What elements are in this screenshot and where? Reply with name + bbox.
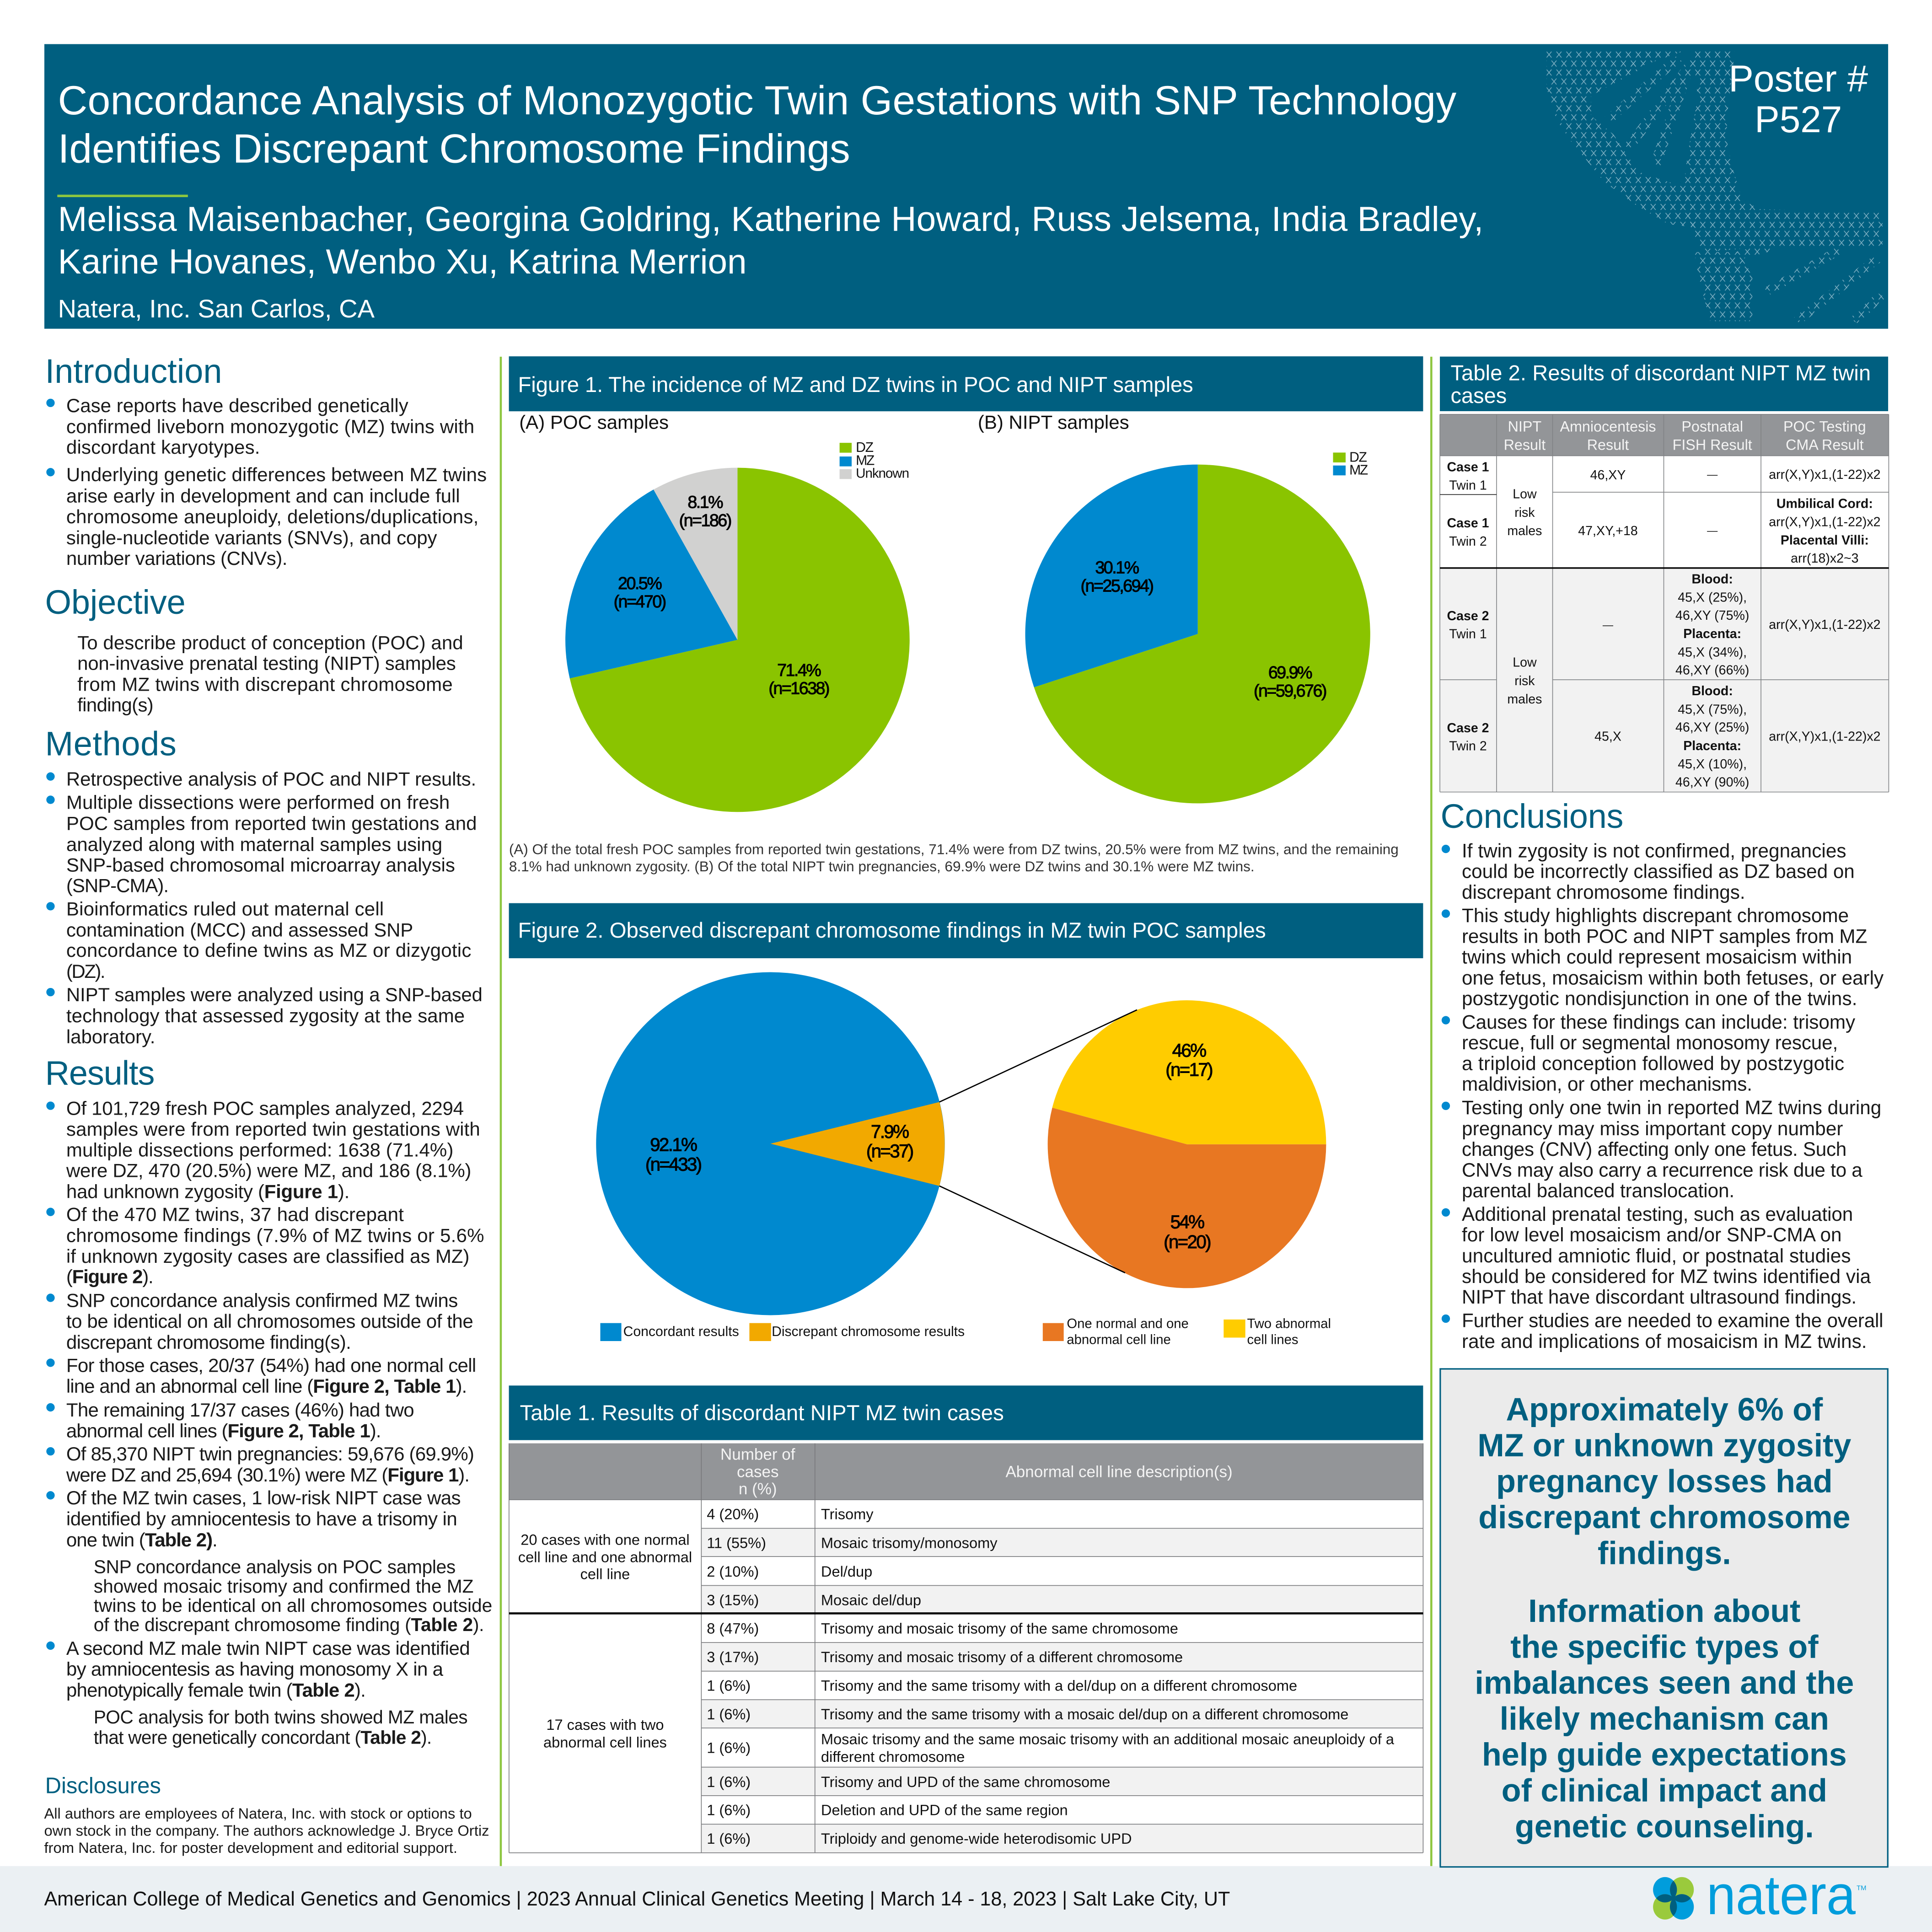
text: results: For those cases, 20/37 (54%) had one normal cell — [66, 1354, 476, 1376]
column divider right — [1430, 357, 1433, 1866]
text: results: were DZ and 25,694 (30.1%) were MZ (Figure 1). — [66, 1464, 470, 1486]
text: results: chromosome findings (7.9% of MZ twins or 5.6% — [66, 1224, 484, 1246]
text: conclusions: one fetus, mosaicism within both fetuses, or early — [1462, 967, 1884, 988]
callout: key takeaway: Approximately 6% of — [1506, 1392, 1823, 1428]
authors: Karine Hovanes, Wenbo Xu, Katrina Merrion — [58, 242, 746, 281]
text: conclusions: parental balanced translocation. — [1462, 1180, 1734, 1202]
table: discordant cases: 46,XY (66%) — [1675, 663, 1749, 678]
text: results: SNP concordance analysis on POC samples — [94, 1556, 456, 1578]
table: results: 1 (6%) — [707, 1706, 751, 1723]
table: results: 11 (55%) — [707, 1534, 766, 1551]
text: methods: analyzed along with maternal samples using — [66, 833, 442, 855]
heading bar: figure 2: Figure 2. Observed discrepant chromosome findings in MZ twin POC samples — [518, 918, 1266, 943]
table: discordant cases: 45,X (34%), — [1678, 645, 1747, 660]
pie chart: discrepant breakdown: (n=20) — [1164, 1231, 1210, 1252]
text: disclosures: own stock in the company. The authors acknowledge J. Bryce Ortiz — [44, 1822, 489, 1839]
text: introduction: Case reports have described genetically — [66, 395, 408, 416]
heading: conclusions: Conclusions — [1441, 797, 1623, 835]
table: discordant cases: Case 1 — [1447, 516, 1489, 531]
legend: right pie: cell lines — [1247, 1332, 1299, 1347]
text: introduction: Underlying genetic differences between MZ twins — [66, 464, 487, 485]
table: results — [509, 1444, 1423, 1853]
table: results: 1 (6%) — [707, 1830, 751, 1847]
text: methods: Bioinformatics ruled out maternal cell — [66, 898, 384, 919]
text: results: were DZ, 470 (20.5%) were MZ, and 186 (8.1%) — [66, 1159, 471, 1181]
table: results: 1 (6%) — [707, 1677, 751, 1694]
callout: key takeaway: the specific types of — [1510, 1629, 1819, 1665]
table: discordant cases: Case 2 — [1447, 721, 1489, 735]
text: results: by amniocentesis as having monosomy X in a — [66, 1658, 444, 1680]
callout: key takeaway: genetic counseling. — [1515, 1809, 1814, 1844]
table: results: Abnormal cell line description(s) — [1005, 1463, 1233, 1481]
legend: right pie: Two abnormal — [1247, 1316, 1331, 1331]
text: methods: laboratory. — [66, 1026, 155, 1047]
text: methods: NIPT samples were analyzed using a SNP-based — [66, 984, 483, 1005]
text: results: abnormal cell lines (Figure 2, Table 1). — [66, 1420, 381, 1442]
table: discordant cases: 46,XY (75%) — [1675, 608, 1749, 623]
bullets: introduction — [46, 399, 55, 476]
pie chart: POC samples: (n=1638) — [768, 679, 829, 698]
legend: left pie — [600, 1323, 965, 1341]
text: objective: To describe product of conception (POC) and — [77, 632, 463, 654]
section: methods — [45, 724, 483, 1047]
table: discordant cases: Postnatal — [1681, 419, 1743, 435]
heading: objective: Objective — [45, 583, 186, 621]
text: results: Of 101,729 fresh POC samples analyzed, 2294 — [66, 1097, 464, 1119]
heading bar: table 1 — [509, 1385, 1423, 1440]
caption: figure 1 — [509, 841, 1399, 875]
green accent rule — [57, 195, 188, 197]
table: discordant cases: 45,X (25%), — [1678, 590, 1747, 605]
table: discordant cases: Placental Villi: — [1781, 533, 1869, 547]
text: results: SNP concordance analysis confirmed MZ twins — [66, 1289, 458, 1311]
bullets: methods — [46, 773, 55, 996]
legend: POC samples: MZ — [856, 453, 875, 468]
text: conclusions: This study highlights discrepant chromosome — [1462, 905, 1849, 926]
callout: key takeaway: likely mechanism can — [1500, 1701, 1829, 1737]
table: results: different chromosome — [821, 1748, 965, 1765]
pie chart: POC samples — [565, 468, 910, 812]
legend: POC samples — [840, 440, 909, 481]
pie chart: all MZ twins: 7.9% — [871, 1121, 909, 1142]
text: results: identified by amniocentesis to have a trisomy in — [66, 1508, 457, 1530]
logo: natera: natera — [1707, 1864, 1856, 1926]
text: results: samples were from reported twin gestations with — [66, 1118, 480, 1140]
table: discordant cases: Blood: — [1691, 684, 1733, 698]
heading bar: table 2: cases — [1451, 383, 1507, 408]
subtitle: POC samples: (A) POC samples — [519, 411, 669, 433]
text: results: showed mosaic trisomy and confirmed the MZ — [94, 1576, 474, 1597]
text: introduction — [66, 395, 487, 569]
text: conclusions: should be considered for MZ twins identified via — [1462, 1266, 1871, 1287]
text: introduction: single-nucleotide variants (SNVs), and copy — [66, 527, 437, 548]
text: conclusions: twins which could represent mosaicism within — [1462, 946, 1852, 968]
table: discordant cases: — — [1707, 524, 1718, 536]
connector lines — [939, 1010, 1137, 1273]
callout: key takeaway: of clinical impact and — [1502, 1773, 1827, 1809]
pie chart: discrepant breakdown: 46% — [1172, 1040, 1206, 1061]
authors — [58, 200, 1483, 281]
text: conclusions: Testing only one twin in reported MZ twins during — [1462, 1097, 1881, 1118]
section: introduction — [45, 352, 487, 569]
pie chart: discrepant breakdown: 54% — [1170, 1212, 1204, 1233]
table: discordant cases: 45,X (75%), — [1678, 702, 1747, 717]
text: conclusions: NIPT that have discordant ultrasound findings. — [1462, 1286, 1857, 1308]
header banner — [44, 44, 1888, 329]
table: discordant cases: Twin 1 — [1449, 627, 1487, 642]
table: discordant cases: 46,XY (25%) — [1675, 720, 1749, 735]
text: results: phenotypically female twin (Table 2). — [66, 1679, 366, 1701]
text: conclusions: maldivision, or other mechanisms. — [1462, 1073, 1752, 1095]
table: results: Trisomy and mosaic trisomy of the same chromosome — [821, 1620, 1178, 1637]
section: disclosures — [44, 1774, 489, 1856]
table: discordant cases: Twin 2 — [1449, 739, 1487, 754]
text: conclusions: discrepant chromosome findings. — [1462, 881, 1745, 903]
table: discordant cases: Low — [1513, 655, 1537, 670]
text: conclusions: Further studies are needed to examine the overall — [1462, 1309, 1884, 1331]
table: discordant cases: 46,XY (90%) — [1675, 775, 1749, 790]
text: introduction: confirmed liveborn monozygotic (MZ) twins with — [66, 416, 474, 437]
table: discordant cases: arr(X,Y)x1,(1-22)x2 — [1769, 515, 1881, 529]
table: discordant cases: Result — [1504, 436, 1546, 453]
text: conclusions: results in both POC and NIPT samples from MZ — [1462, 926, 1867, 947]
text: objective: non-invasive prenatal testing (NIPT) samples — [77, 652, 456, 674]
text: conclusions: could be incorrectly classified as DZ based on — [1462, 860, 1855, 882]
table: results: Trisomy and UPD of the same chromosome — [821, 1773, 1110, 1790]
table: discordant cases: males — [1507, 692, 1542, 707]
callout: key takeaway: imbalances seen and the — [1475, 1665, 1854, 1701]
heading bar: table 1: Table 1. Results of discordant NIPT MZ twin cases — [520, 1401, 1004, 1425]
text: conclusions: changes (CNV) affecting only one fetus. Such — [1462, 1138, 1846, 1160]
callout: key takeaway: MZ or unknown zygosity — [1477, 1428, 1851, 1463]
table: results: cases — [737, 1463, 778, 1481]
poster title: Concordance Analysis of Monozygotic Twin Gestations with SNP Technology — [58, 77, 1456, 123]
table: discordant cases: Twin 1 — [1449, 478, 1487, 493]
table: results: Mosaic trisomy and the same mosaic trisomy with an additional mosaic aneuploidy of a — [821, 1731, 1395, 1748]
table: discordant cases: arr(X,Y)x1,(1-22)x2 — [1769, 730, 1881, 744]
pie chart: all MZ twins: (n=37) — [866, 1140, 913, 1161]
subtitle: NIPT samples: (B) NIPT samples — [978, 411, 1129, 433]
table: discordant cases: NIPT — [1508, 419, 1541, 435]
legend: right pie — [1043, 1316, 1331, 1347]
bullets: conclusions — [1442, 845, 1450, 1323]
text: disclosures: from Natera, Inc. for poster development and editorial support. — [44, 1839, 457, 1856]
text: results: discrepant chromosome finding(s). — [66, 1331, 351, 1353]
table: results: 1 (6%) — [707, 1802, 751, 1819]
table: results: 3 (17%) — [707, 1648, 759, 1665]
table: discordant cases: risk — [1514, 505, 1535, 520]
bullets: results — [46, 1101, 55, 1650]
table: discordant cases: arr(X,Y)x1,(1-22)x2 — [1769, 617, 1881, 632]
table: results: Number of — [720, 1445, 795, 1463]
text: results: had unknown zygosity (Figure 1). — [66, 1181, 349, 1202]
pie chart: NIPT samples: 30.1% — [1095, 558, 1139, 577]
table: discordant cases: Result — [1587, 436, 1629, 453]
text: conclusions: uncultured amniotic fluid, or postnatal studies — [1462, 1245, 1851, 1267]
callout: key takeaway — [1440, 1369, 1888, 1867]
table: discordant cases: Placenta: — [1683, 627, 1741, 641]
text: methods: technology that assessed zygosity at the same — [66, 1005, 465, 1026]
text: methods: Retrospective analysis of POC and NIPT results. — [66, 768, 476, 790]
table: results: 3 (15%) — [707, 1591, 759, 1608]
legend: left pie: Discrepant chromosome results — [772, 1324, 965, 1339]
table: discordant cases: Umbilical Cord: — [1776, 497, 1873, 511]
text: results: of the discrepant chromosome finding (Table 2). — [94, 1614, 484, 1635]
text: conclusions: Additional prenatal testing, such as evaluation — [1462, 1203, 1853, 1225]
pie chart: POC samples: 20.5% — [618, 574, 662, 593]
text: disclosures — [44, 1805, 489, 1856]
table: discordant cases: risk — [1514, 674, 1535, 688]
table: discordant cases: CMA Result — [1786, 436, 1864, 453]
authors: Melissa Maisenbacher, Georgina Goldring, Katherine Howard, Russ Jelsema, India Bradley, — [58, 200, 1483, 239]
callout: key takeaway: findings. — [1598, 1535, 1731, 1571]
text: conclusions: pregnancy may miss important copy number — [1462, 1118, 1843, 1139]
panel: table 2 — [1440, 357, 1889, 792]
poster number: P527 — [1755, 99, 1842, 140]
text: conclusions: postzygotic nondisjunction in one of the twins. — [1462, 987, 1857, 1009]
table: results: Mosaic del/dup — [821, 1591, 921, 1608]
text: results: (Figure 2). — [66, 1266, 154, 1288]
table: discordant cases — [1440, 414, 1889, 792]
table: results: 4 (20%) — [707, 1505, 759, 1522]
text: methods: concordance to define twins as MZ or dizygotic — [66, 939, 471, 961]
text: results: Of the MZ twin cases, 1 low-risk NIPT case was — [66, 1487, 461, 1508]
text: methods — [66, 768, 483, 1047]
heading bar: figure 2 — [509, 903, 1423, 958]
pie chart: all MZ twins — [596, 972, 945, 1315]
heading bar: table 2 — [1440, 357, 1888, 411]
table: discordant cases: males — [1507, 524, 1542, 538]
table: discordant cases: 45,X (10%), — [1678, 757, 1747, 772]
text: conclusions: CNVs may also carry a recurrence risk due to a — [1462, 1159, 1862, 1181]
table: discordant cases: FISH Result — [1673, 436, 1752, 453]
table: discordant cases: Case 2 — [1447, 609, 1489, 623]
text: results: line and an abnormal cell line (Figure 2, Table 1). — [66, 1375, 467, 1397]
pie chart: NIPT samples — [1025, 465, 1370, 803]
legend: NIPT samples — [1333, 450, 1368, 478]
text: methods: POC samples from reported twin gestations and — [66, 813, 477, 834]
table: results: Deletion and UPD of the same region — [821, 1802, 1068, 1819]
legend: POC samples: Unknown — [856, 466, 909, 481]
legend: left pie: Concordant results — [623, 1324, 739, 1339]
text: introduction: arise early in development and can include full — [66, 485, 460, 506]
table: discordant cases: — — [1707, 468, 1718, 480]
text: results: POC analysis for both twins showed MZ males — [94, 1707, 468, 1728]
logo: natera: TM — [1857, 1884, 1867, 1892]
text: objective: from MZ twins with discrepant chromosome — [77, 673, 453, 695]
text: conclusions: a triploid conception followed by postzygotic — [1462, 1053, 1844, 1074]
text: results: Of the 470 MZ twins, 37 had discrepant — [66, 1204, 404, 1225]
callout: key takeaway: pregnancy losses had — [1496, 1463, 1833, 1499]
section: conclusions — [1441, 797, 1884, 1352]
table: discordant cases: 47,XY,+18 — [1578, 524, 1638, 538]
text: results: if unknown zygosity cases are classified as MZ) — [66, 1245, 469, 1267]
table: results: 1 (6%) — [707, 1739, 751, 1756]
legend: right pie: abnormal cell line — [1067, 1332, 1171, 1347]
heading: introduction: Introduction — [45, 352, 222, 390]
section: results — [45, 1054, 492, 1748]
legend: NIPT samples: DZ — [1349, 450, 1367, 465]
table: discordant cases: — — [1603, 619, 1614, 631]
table: results: Trisomy — [821, 1505, 874, 1522]
text: conclusions: Causes for these findings can include: trisomy — [1462, 1011, 1856, 1033]
text: methods: Multiple dissections were performed on fresh — [66, 792, 450, 813]
text: methods: contamination (MCC) and assessed SNP — [66, 919, 413, 940]
heading bar: figure 1 — [509, 356, 1423, 411]
legend: right pie: One normal and one — [1067, 1316, 1189, 1331]
pie chart: NIPT samples: (n=25,694) — [1081, 576, 1153, 595]
text: conclusions: If twin zygosity is not confirmed, pregnancies — [1462, 840, 1846, 861]
text: results: Of 85,370 NIPT twin pregnancies: 59,676 (69.9%) — [66, 1443, 474, 1465]
panel: figure 2 — [509, 903, 1423, 1347]
table: results: 2 (10%) — [707, 1563, 759, 1580]
heading: results: Results — [45, 1054, 155, 1092]
pie chart: NIPT samples: (n=59,676) — [1254, 681, 1326, 700]
pie chart: POC samples: 71.4% — [777, 660, 821, 680]
table: discordant cases: arr(X,Y)x1,(1-22)x2 — [1769, 467, 1881, 482]
text: introduction: discordant karyotypes. — [66, 436, 260, 458]
table: discordant cases: arr(18)x2~3 — [1791, 551, 1859, 566]
table: discordant cases: Low — [1513, 487, 1537, 502]
text: methods: (DZ). — [66, 961, 106, 982]
table: discordant cases: Amniocentesis — [1560, 419, 1656, 435]
text: objective — [77, 632, 463, 715]
pie chart: NIPT samples: 69.9% — [1268, 663, 1312, 682]
table: results: Del/dup — [821, 1563, 872, 1580]
table: results: n (%) — [739, 1480, 777, 1498]
caption: figure 1: (A) Of the total fresh POC samples from reported twin gestations, 71.4% were from DZ twins, 20.5% were from MZ twins, and the remaining — [509, 841, 1399, 857]
table: results: 1 (6%) — [707, 1773, 751, 1790]
callout: key takeaway: discrepant chromosome — [1478, 1499, 1851, 1535]
heading bar: figure 1: Figure 1. The incidence of MZ and DZ twins in POC and NIPT samples — [518, 373, 1193, 397]
table: discordant cases: Placenta: — [1683, 739, 1741, 753]
table: discordant cases: Twin 2 — [1449, 534, 1487, 549]
table: discordant cases: Case 1 — [1447, 460, 1489, 474]
footer band — [0, 1864, 1932, 1932]
poster title: Identifies Discrepant Chromosome Findings — [58, 126, 850, 172]
text: results: to be identical on all chromosomes outside of the — [66, 1310, 473, 1332]
text: conclusions — [1462, 840, 1884, 1352]
text: conclusions: rate and implications of mosaicism in MZ twins. — [1462, 1331, 1867, 1352]
text: results: A second MZ male twin NIPT case was identified — [66, 1637, 470, 1659]
text: results: twins to be identical on all chromosomes outside — [94, 1595, 492, 1616]
pie chart: discrepant breakdown: (n=17) — [1165, 1059, 1212, 1080]
caption: figure 1: 8.1% had unknown zygosity. (B) Of the total NIPT twin pregnancies, 69.9% were DZ twins and 30.1% were MZ twins. — [509, 858, 1255, 875]
text: results: multiple dissections performed: 1638 (71.4%) — [66, 1139, 453, 1161]
table: results: 8 (47%) — [707, 1620, 759, 1637]
table: discordant cases: Blood: — [1691, 572, 1733, 586]
panel: figure 1 — [509, 356, 1423, 875]
conference line: American College of Medical Genetics and Genomics | 2023 Annual Clinical Genetics Meeting | March 14 - 18, 2023 | Salt Lake City, UT — [44, 1888, 1230, 1910]
table: results: Triploidy and genome-wide heterodisomic UPD — [821, 1830, 1132, 1847]
DNA helix decoration — [1546, 49, 1883, 321]
table: results: Trisomy and the same trisomy with a mosaic del/dup on a different chromosome — [821, 1706, 1348, 1723]
text: methods: SNP-based chromosomal microarray analysis — [66, 854, 455, 875]
affiliation: Natera, Inc. San Carlos, CA — [58, 294, 375, 323]
pie chart: POC samples: (n=470) — [614, 592, 666, 611]
table: discordant cases: 45,X — [1594, 730, 1621, 744]
pie chart: discrepant breakdown — [1048, 1000, 1326, 1288]
text: introduction: chromosome aneuploidy, deletions/duplications, — [66, 506, 478, 527]
table: discordant cases: 46,XY — [1590, 468, 1626, 483]
text: disclosures: All authors are employees of Natera, Inc. with stock or options to — [44, 1805, 472, 1822]
text: methods: (SNP-CMA). — [66, 875, 169, 896]
text: objective: finding(s) — [77, 694, 154, 715]
poster number: Poster # — [1728, 58, 1868, 100]
table: results: abnormal cell lines — [543, 1734, 667, 1751]
table: discordant cases: POC Testing — [1783, 419, 1866, 435]
pie chart: POC samples: (n=186) — [679, 510, 731, 530]
table: results: cell line and one abnormal — [518, 1548, 692, 1565]
heading bar: table 2: Table 2. Results of discordant NIPT MZ twin — [1451, 360, 1871, 385]
pie chart: all MZ twins: (n=433) — [645, 1154, 701, 1175]
text: results: The remaining 17/37 cases (46%) had two — [66, 1399, 414, 1421]
table: results: 17 cases with two — [546, 1716, 664, 1733]
text: introduction: number variations (CNVs). — [66, 547, 287, 569]
text: results: that were genetically concordant (Table 2). — [94, 1727, 432, 1748]
poster title — [58, 77, 1456, 172]
callout: key takeaway: help guide expectations — [1482, 1737, 1847, 1772]
heading: disclosures: Disclosures — [45, 1774, 161, 1798]
text: conclusions: for low level mosaicism and/or SNP-CMA on — [1462, 1224, 1842, 1245]
callout: key takeaway: Information about — [1528, 1593, 1800, 1629]
table: results: cell line — [580, 1565, 630, 1582]
poster number — [1728, 58, 1868, 140]
section: objective — [45, 583, 463, 715]
table: results: Mosaic trisomy/monosomy — [821, 1534, 998, 1551]
pie chart: all MZ twins: 92.1% — [650, 1134, 697, 1155]
text: results — [66, 1097, 492, 1748]
table: results: 20 cases with one normal — [521, 1531, 690, 1548]
column divider left — [500, 357, 502, 1866]
text: conclusions: rescue, full or segmental monosomy rescue, — [1462, 1032, 1838, 1053]
heading: methods: Methods — [45, 724, 177, 762]
table: results: Trisomy and mosaic trisomy of a different chromosome — [821, 1648, 1183, 1665]
text: results: one twin (Table 2). — [66, 1529, 218, 1551]
panel: table 1 — [509, 1385, 1423, 1853]
legend: POC samples: DZ — [856, 440, 874, 455]
legend: NIPT samples: MZ — [1349, 463, 1368, 478]
pie chart: POC samples: 8.1% — [687, 492, 723, 511]
table: results: Trisomy and the same trisomy with a del/dup on a different chromosome — [821, 1677, 1297, 1694]
logo: natera — [1653, 1877, 1866, 1920]
